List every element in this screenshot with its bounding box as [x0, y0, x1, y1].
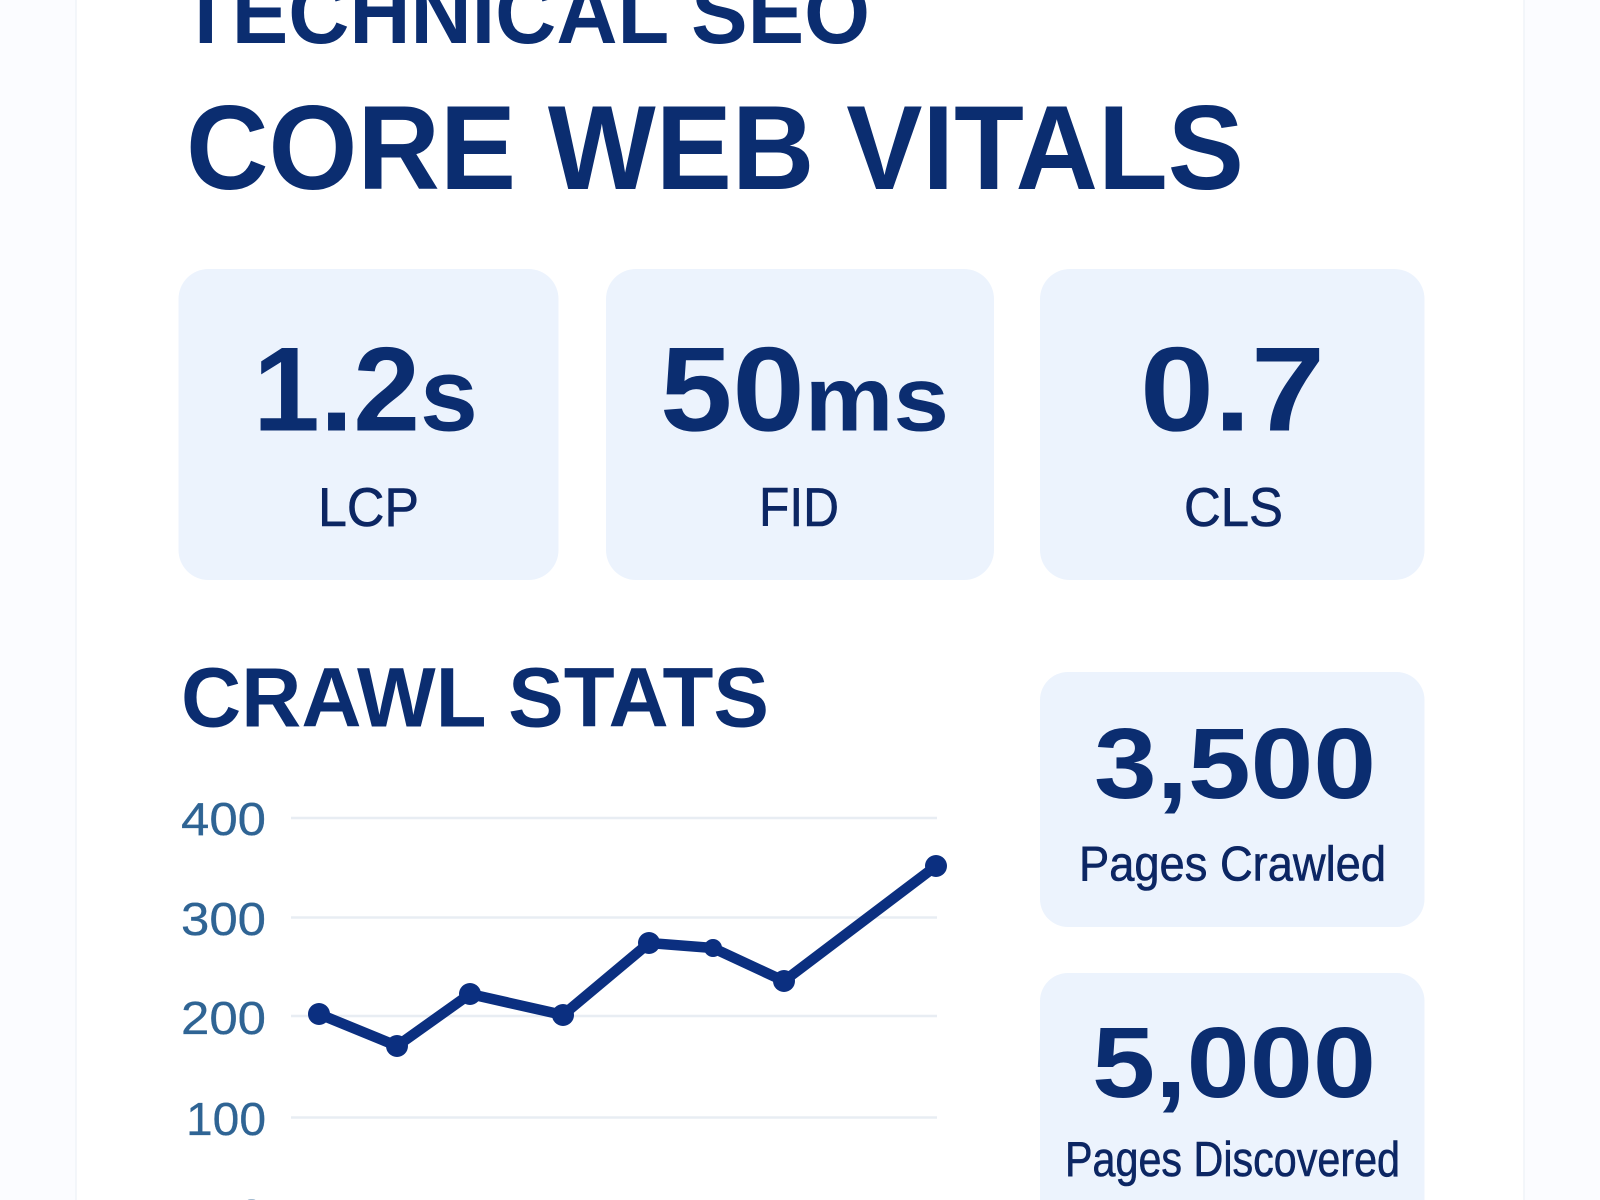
card: FID metric — [606, 269, 994, 580]
card: pages crawled — [1040, 672, 1424, 927]
card: LCP metric: 1.2s — [253, 322, 478, 456]
line chart: crawl stats — [181, 793, 947, 1200]
y axis labels: 200 — [181, 992, 266, 1044]
card: CLS metric — [1040, 269, 1424, 580]
card: FID metric: 50ms — [660, 322, 949, 456]
card: CLS metric: 0.7 — [1140, 322, 1325, 456]
y axis labels: 100 — [186, 1093, 266, 1145]
card: LCP metric: LCP — [318, 476, 419, 538]
card: pages discovered: Pages Discovered — [1065, 1133, 1400, 1187]
card: pages discovered: 5,000 — [1092, 1007, 1376, 1119]
y axis labels: 300 — [181, 893, 266, 945]
card: pages crawled: Pages Crawled — [1079, 838, 1386, 892]
card: CLS metric: CLS — [1184, 476, 1283, 538]
data line — [319, 866, 936, 1046]
card: pages discovered — [1040, 973, 1424, 1200]
y axis labels: 400 — [181, 793, 266, 845]
heading: crawl stats: CRAWL STATS — [181, 650, 769, 744]
card: LCP metric — [178, 269, 558, 580]
data points — [308, 855, 947, 1057]
y axis labels — [181, 793, 266, 1200]
title: core web vitals: CORE WEB VITALS — [186, 81, 1244, 215]
card: FID metric: FID — [759, 476, 839, 538]
card: pages crawled: 3,500 — [1094, 708, 1376, 820]
